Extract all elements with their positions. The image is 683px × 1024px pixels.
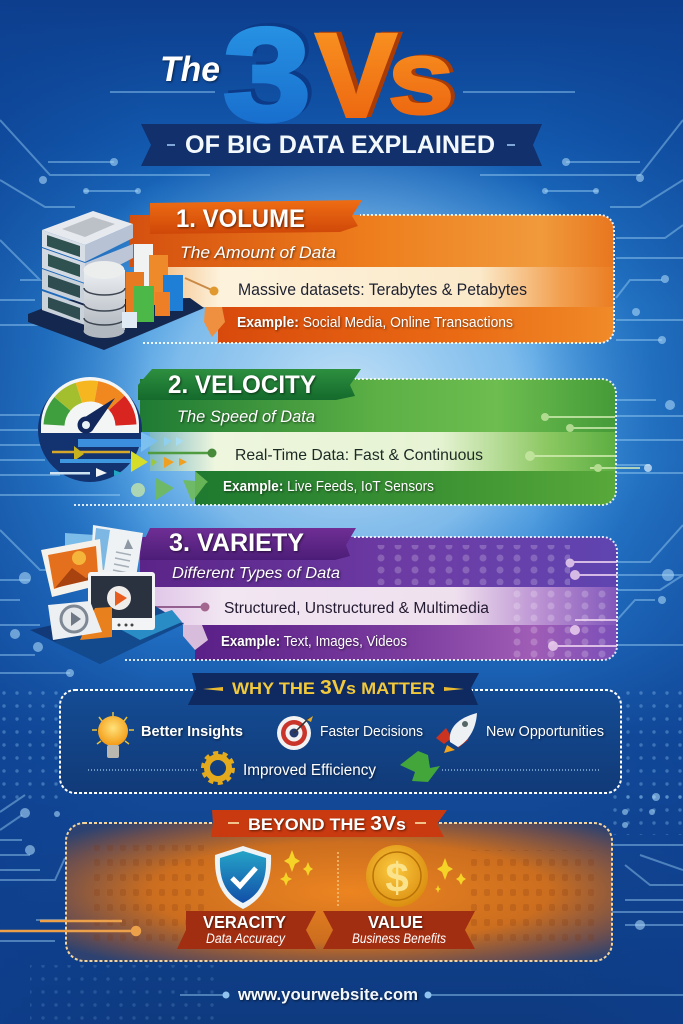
banner: why: WHY THE 3Vs MATTER (232, 677, 435, 699)
sparkles (280, 850, 466, 893)
title letters: Vs: s (388, 20, 454, 136)
subtitle banner (141, 124, 542, 166)
bottom unit (42, 291, 85, 325)
photo (41, 539, 104, 597)
velocity description: Real-Time Data: Fast & Continuous (235, 447, 483, 464)
connector dot (155, 606, 205, 608)
footer website: www.yourwebsite.com (237, 986, 418, 1004)
ribbon: value: Business Benefits (352, 931, 446, 946)
ribbon: velocity (138, 369, 361, 400)
panel: variety (125, 528, 617, 660)
ribbon: volume: 1. VOLUME (176, 205, 305, 233)
ribbon: volume (150, 200, 362, 234)
item: better insights (92, 712, 243, 758)
ribbon: value (323, 911, 475, 949)
connector lines (0, 921, 140, 935)
title (160, 0, 458, 148)
title numeral: 3: 3 (227, 0, 315, 145)
description band (168, 267, 614, 307)
variety example: Example: Text, Images, Videos (221, 634, 407, 650)
icon: coin (366, 845, 428, 907)
example band (195, 625, 617, 660)
icon: servers and bar chart (28, 211, 204, 350)
velocity example: Example: Live Feeds, IoT Sensors (223, 479, 434, 495)
panel: volume (130, 200, 614, 343)
ribbon: veracity (177, 911, 316, 949)
icon: coin: $ (385, 854, 409, 901)
icon: speedometer (38, 377, 142, 482)
title letters: Vs: s (392, 19, 458, 135)
title numeral: 3: 3 (223, 1, 311, 148)
panel: beyond the 3Vs (0, 810, 612, 961)
ribbon: veracity: Data Accuracy (206, 931, 286, 946)
arrow tab (183, 625, 208, 650)
variety description: Structured, Unstructured & Multimedia (224, 600, 489, 617)
title letters: Vs (316, 9, 458, 142)
third unit (42, 269, 85, 304)
item: faster decisions: Faster Decisions (320, 723, 423, 740)
title letters: Vs: V (321, 9, 401, 141)
variety subtitle: Different Types of Data (172, 565, 340, 582)
example band (218, 307, 614, 343)
icon: shield (215, 846, 271, 909)
subtitle text: OF BIG DATA EXPLAINED (185, 131, 495, 159)
banner: beyond: BEYOND THE 3Vs (248, 813, 406, 835)
top unit (42, 230, 85, 262)
document (90, 525, 143, 590)
description band (150, 432, 616, 471)
icon: media files (30, 525, 184, 664)
ribbon: variety (140, 528, 356, 560)
connector dot (185, 278, 214, 291)
example band (195, 471, 616, 505)
video screen (88, 572, 155, 630)
needle (82, 398, 115, 431)
banner: why (188, 673, 479, 705)
arrow tab (204, 307, 225, 337)
ribbon: veracity: VERACITY (203, 912, 286, 932)
data links (549, 560, 617, 650)
title word: The: The (160, 50, 220, 89)
server stack (42, 211, 133, 325)
title letters: Vs: V (316, 10, 396, 142)
item: improved efficiency: Improved Efficiency (243, 762, 376, 779)
icon: green growth arrow (400, 751, 440, 782)
database cylinder (84, 261, 125, 338)
panel: why the 3Vs matter (60, 673, 621, 793)
panel: velocity (74, 369, 652, 505)
description band (153, 587, 617, 625)
item: faster decisions (277, 716, 423, 750)
ribbon: variety: 3. VARIETY (169, 529, 304, 557)
speed arrows (50, 432, 216, 477)
circuit nodes (10, 158, 675, 930)
data dots (525, 413, 652, 472)
green chevrons (131, 471, 208, 502)
item: better insights: Better Insights (141, 723, 243, 740)
orange file (80, 607, 112, 640)
volume subtitle: The Amount of Data (180, 243, 336, 262)
bars (122, 244, 183, 328)
item: new opportunities (436, 713, 604, 753)
velocity subtitle: The Speed of Data (177, 408, 315, 426)
item: new opportunities: New Opportunities (486, 723, 604, 740)
ribbon: velocity: 2. VELOCITY (168, 371, 316, 399)
video file (48, 601, 102, 640)
second unit (42, 248, 85, 283)
item: improved efficiency (203, 753, 376, 783)
volume example: Example: Social Media, Online Transactions (237, 314, 513, 331)
banner: beyond (211, 810, 447, 837)
ribbon: value: VALUE (368, 912, 423, 932)
volume description: Massive datasets: Terabytes & Petabytes (238, 281, 527, 299)
